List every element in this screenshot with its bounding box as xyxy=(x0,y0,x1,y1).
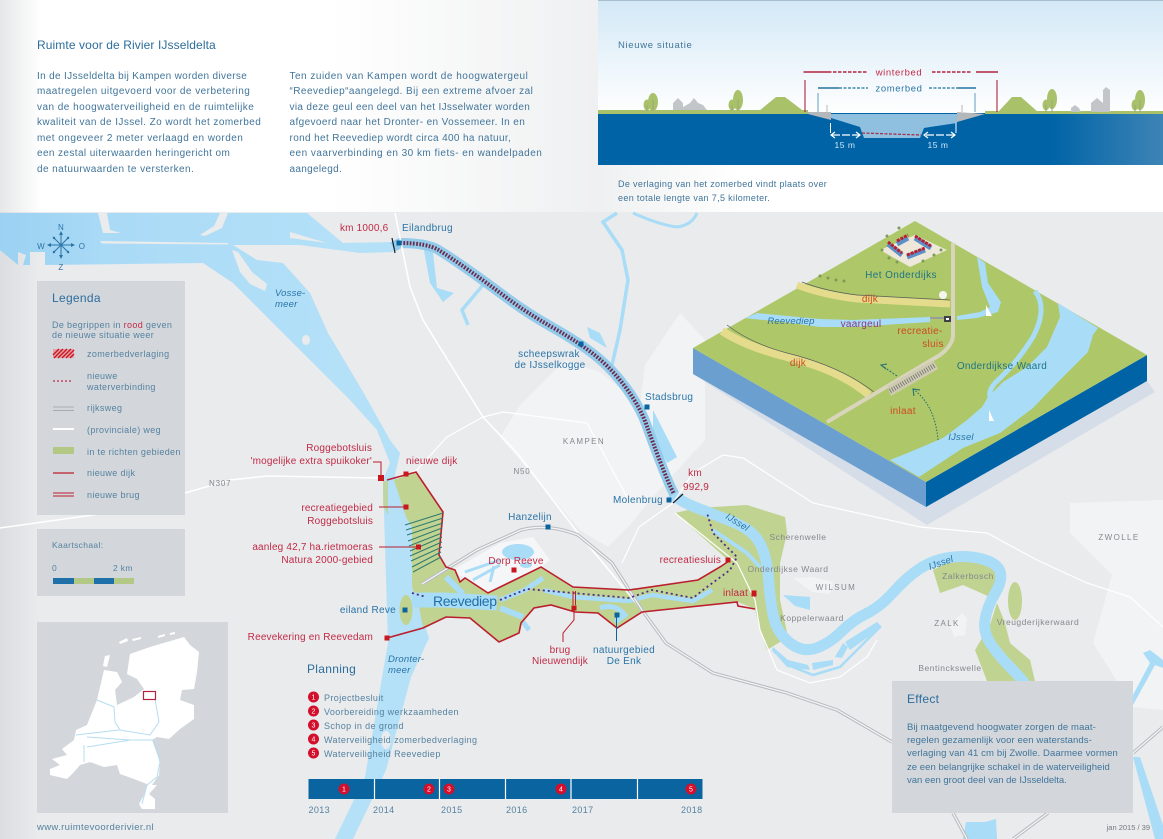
map labels: red: recreatiegebied xyxy=(301,503,373,514)
map labels: grey: Koppelerwaard xyxy=(780,613,844,623)
panel: isometric block diagram xyxy=(693,221,1155,525)
planning heading: Planning xyxy=(307,662,356,676)
winterbed marker xyxy=(804,68,998,112)
map labels: blue: Dronter- xyxy=(388,654,424,665)
urban areas xyxy=(500,313,1163,710)
planning list: 4 xyxy=(312,736,316,744)
map labels: grey: Onderdijkse Waard xyxy=(748,564,828,574)
map labels: blue: Eilandbrug xyxy=(402,223,453,234)
planning list: Voorbereiding werkzaamheden xyxy=(324,707,459,717)
map labels: blue: Molenbrug xyxy=(613,495,663,506)
15 m dimension arrows xyxy=(830,123,956,150)
rivers on locator map xyxy=(76,699,160,804)
river IJssel xyxy=(393,243,1030,690)
15 m dimension arrows: 15 m xyxy=(835,140,855,150)
panel: cross-section nieuwe situatie xyxy=(598,0,1163,165)
effect text: Bij maatgevend hoogwater zorgen de maat- xyxy=(907,722,1096,733)
text block: right column: afgevoerd naar het Dronter- en Vossemeer. In en xyxy=(290,117,525,128)
legend swatch: provinciale weg: (provinciale) weg xyxy=(87,425,161,435)
effect heading: Effect xyxy=(907,692,940,706)
map labels: grey: ZWOLLE xyxy=(1098,533,1140,542)
map labels: red: Roggebotsluis xyxy=(307,516,373,527)
rijksweg xyxy=(422,527,1163,839)
block water xyxy=(745,257,1098,477)
caption: cross-section xyxy=(618,179,827,203)
planning timeline: 2016 xyxy=(506,805,527,815)
block labels: inlaat xyxy=(890,406,916,417)
caption: cross-section: De verlaging van het zomerbed vindt plaats over xyxy=(618,179,827,189)
legend note: De begrippen in rood geven xyxy=(52,320,172,330)
heading: Nieuwe situatie xyxy=(618,40,692,51)
icon: compass: W xyxy=(37,242,45,251)
local roads xyxy=(408,412,1163,683)
panel: map scale: 2 km xyxy=(113,563,133,573)
planning timeline: 2017 xyxy=(572,805,593,815)
map labels: blue: Hanzelijn xyxy=(508,512,552,523)
legend swatch: in te richten gebieden: in te richten gebieden xyxy=(87,447,181,457)
brug Nieuwendijk marker: brug xyxy=(550,645,570,656)
effect text xyxy=(907,722,1118,786)
text block: right column: aangelegd. xyxy=(290,164,342,175)
planning timeline: 2015 xyxy=(441,805,462,815)
map labels: grey: Bentinckswelle xyxy=(918,663,982,673)
block faces xyxy=(693,221,1147,507)
text block: left column: van de hoogwaterveiligheid en de ruimtelijke xyxy=(37,102,254,113)
map labels: blue: natuurgebied xyxy=(593,645,655,656)
planning timeline: 4 xyxy=(559,786,563,794)
block shadow xyxy=(693,374,1155,525)
blue markers xyxy=(396,240,672,641)
inlet structure xyxy=(887,360,938,396)
legend swatch: nieuwe dijk: nieuwe dijk xyxy=(87,468,136,478)
map labels: blue: De Enk xyxy=(607,656,642,667)
new waterway dotted line xyxy=(412,513,737,600)
panel: planning xyxy=(307,662,702,815)
legend swatch: nieuwe dijk xyxy=(53,468,136,478)
bridge ticks xyxy=(392,238,683,503)
Dorp Reeve area xyxy=(453,537,550,593)
N50 road xyxy=(395,213,642,610)
effect text: van een groot deel van de IJsseldelta. xyxy=(907,775,1067,786)
map labels: blue: Reevediep xyxy=(433,593,497,609)
panel: legend xyxy=(37,281,185,515)
map labels: blue: IJssel xyxy=(927,554,956,573)
block labels: recreatie- xyxy=(897,326,943,337)
new dike lines xyxy=(387,472,755,642)
planning timeline: 2018 xyxy=(681,805,702,815)
text block: left column: met ongeveer 2 meter verlaagd en worden xyxy=(37,133,243,144)
map labels: grey: Scherenwelle xyxy=(769,532,827,542)
brug Nieuwendijk marker: Nieuwendijk xyxy=(532,656,589,667)
trees and buildings xyxy=(644,87,1145,112)
planning list xyxy=(308,692,477,759)
text block: left column: de natuurwaarden te versterken. xyxy=(37,164,194,175)
map labels: blue: scheepswrak xyxy=(518,349,581,360)
map labels: red: 992,9 xyxy=(683,482,709,493)
planning timeline: 1 xyxy=(342,786,346,794)
map labels: red xyxy=(248,223,748,643)
recreation lock xyxy=(930,316,951,322)
map labels: red: aanleg 42,7 ha.rietmoeras xyxy=(252,542,373,553)
water: side canals xyxy=(423,213,1163,839)
planning list: Projectbesluit xyxy=(324,693,384,703)
Wadden islands xyxy=(103,632,175,667)
caption: cross-section: een totale lengte van 7,5 kilometer. xyxy=(618,193,770,203)
website: www.ruimtevoorderivier.nl xyxy=(36,822,154,833)
map labels: red: 'mogelijke extra spuikoker' xyxy=(250,456,372,467)
block labels: dijk xyxy=(790,358,807,369)
map labels: grey: Vreugderijkerwaard xyxy=(997,617,1079,627)
icon: compass: N xyxy=(58,223,64,232)
planning timeline: 2013 xyxy=(308,805,330,815)
flow arrows xyxy=(881,364,938,440)
map labels: grey xyxy=(209,437,1140,673)
map labels: grey: N307 xyxy=(209,479,231,488)
block labels: Onderdijkse Waard xyxy=(957,361,1047,372)
river channel xyxy=(808,112,985,138)
map labels: blue xyxy=(275,223,956,676)
map labels: grey: N50 xyxy=(513,467,531,476)
map labels: red: Reevekering en Reevedam xyxy=(248,632,373,643)
map xyxy=(0,212,1163,839)
text block: right column: Ten zuiden van Kampen wordt de hoogwatergeul xyxy=(290,71,528,82)
introduction text xyxy=(37,38,542,175)
planning list: 2 xyxy=(312,708,316,716)
15 m dimension arrows: 15 m xyxy=(928,140,948,150)
block labels: sluis xyxy=(922,339,944,350)
red markers xyxy=(378,472,756,640)
planning list: Waterveiligheid zomerbedverlaging xyxy=(324,735,477,745)
Reevediep water channel xyxy=(412,530,760,630)
effect text: regelen gezamenlijk voor een waterstands- xyxy=(907,735,1092,746)
planning list: Waterveiligheid Reevediep xyxy=(324,749,441,759)
map labels: blue: meer xyxy=(388,665,411,676)
map labels: grey: KAMPEN xyxy=(563,437,605,446)
panel: map scale xyxy=(37,529,185,596)
panel: Netherlands locator map xyxy=(37,622,228,813)
effect text: ze een belangrijke schakel in de waterveiligheid xyxy=(907,762,1110,773)
panel: map scale: Kaartschaal: xyxy=(52,540,103,550)
text block: left column: een zestal uiterwaarden heringericht om xyxy=(37,148,230,159)
block labels: vaargeul xyxy=(841,319,881,330)
planning timeline: 5 xyxy=(689,786,693,794)
legend heading: Legenda xyxy=(52,291,101,305)
text block: left column xyxy=(37,71,261,175)
winterbed marker: winterbed xyxy=(875,68,922,78)
page background xyxy=(0,0,1163,212)
zomerbed marker xyxy=(818,84,976,112)
map labels: red: Roggebotsluis xyxy=(306,443,372,454)
map labels: red: inlaat xyxy=(723,588,748,599)
panel: map scale: 0 xyxy=(52,563,57,573)
water: sea, Vossemeer and Drontermeer xyxy=(0,213,429,839)
map labels: grey: Zalkerbosch xyxy=(942,571,994,581)
zomerbedverlaging hatching xyxy=(400,243,674,494)
legend note: de nieuwe situatie weer xyxy=(52,330,154,340)
locator rectangle xyxy=(144,692,156,700)
planning list: 5 xyxy=(312,750,316,758)
village Het Onderdijks xyxy=(818,226,947,299)
text block: left column: kwaliteit van de IJssel. Zo wordt het zomerbed xyxy=(37,117,261,128)
map labels: blue: Stadsbrug xyxy=(645,392,693,403)
land details in water xyxy=(98,213,391,749)
block road xyxy=(827,243,953,422)
text block: left column: maatregelen uitgevoerd voor de verbetering xyxy=(37,86,250,97)
text block: right column xyxy=(290,71,542,175)
legend swatch: provinciale weg xyxy=(53,425,161,435)
panel: effect xyxy=(892,681,1133,813)
planning timeline xyxy=(308,779,702,815)
Netherlands outline xyxy=(50,637,199,809)
legend swatch: nieuwe waterverbinding: nieuwe xyxy=(87,371,118,381)
N307 road xyxy=(0,476,380,528)
map labels: red: km xyxy=(688,468,702,479)
page number: jan 2015 / 39 xyxy=(1106,823,1150,832)
block dikes xyxy=(722,282,950,395)
planning list: 1 xyxy=(312,694,316,702)
green zones xyxy=(383,472,1035,681)
legend swatch: nieuwe waterverbinding: waterverbinding xyxy=(86,382,156,392)
icon: compass: Z xyxy=(58,263,64,272)
legend swatch: nieuwe brug xyxy=(53,490,140,500)
block labels: IJssel xyxy=(948,432,974,443)
legend note xyxy=(52,320,172,340)
brug Nieuwendijk marker xyxy=(532,591,589,667)
block labels: dijk xyxy=(862,294,879,305)
block labels: Reevediep xyxy=(767,316,815,327)
map labels: blue: IJssel xyxy=(723,511,751,534)
roads xyxy=(0,213,1163,839)
sailboats xyxy=(986,305,994,421)
planning timeline: 3 xyxy=(447,786,451,794)
planning timeline: 2 xyxy=(427,786,431,794)
text block: right column: een vaarverbinding en 30 km fiets- en wandelpaden xyxy=(290,148,542,159)
icon: compass xyxy=(37,223,85,272)
map labels: red: Dorp Reeve xyxy=(488,556,544,567)
legend swatch: zomerbedverlaging: zomerbedverlaging xyxy=(87,349,170,359)
legend swatch: rijksweg xyxy=(53,403,122,413)
legend swatch: rijksweg: rijksweg xyxy=(87,403,122,413)
map labels: red: Natura 2000-gebied xyxy=(281,555,373,566)
text block: right column: via deze geul een deel van het IJsselwater worden xyxy=(290,102,530,113)
block labels: Het Onderdijks xyxy=(865,270,937,281)
leader lines xyxy=(373,462,418,547)
map labels: blue: de IJsselkogge xyxy=(515,360,586,371)
nature reed marsh hatching xyxy=(405,513,443,572)
planning timeline: 2014 xyxy=(373,805,394,815)
legend swatch: nieuwe brug: nieuwe brug xyxy=(87,490,140,500)
map labels: red: nieuwe dijk xyxy=(406,456,458,467)
map labels: blue: meer xyxy=(275,299,298,310)
legend swatch: nieuwe waterverbinding xyxy=(53,371,156,392)
map labels: grey: ZALK xyxy=(934,619,960,628)
map labels: red: km 1000,6 xyxy=(340,223,389,234)
ground and dikes xyxy=(598,97,1163,114)
text block: left column: In de IJsseldelta bij Kampen worden diverse xyxy=(37,71,247,82)
map labels: blue: eiland Reve xyxy=(340,605,396,616)
map labels: red: recreatiesluis xyxy=(660,555,721,566)
title: Ruimte voor de Rivier IJsseldelta xyxy=(37,38,216,52)
planning list: 3 xyxy=(312,722,316,730)
text block: right column: “Reevediep“aangelegd. Bij een extreme afvoer zal xyxy=(290,86,533,97)
icon: compass: O xyxy=(79,242,85,251)
planning list: Schop in de grond xyxy=(324,721,404,731)
block labels xyxy=(767,270,1047,443)
effect text: verlaging van 41 cm bij Zwolle. Daarmee vormen xyxy=(907,748,1118,759)
map labels: grey: WILSUM xyxy=(816,583,856,592)
zomerbed marker: zomerbed xyxy=(875,84,923,94)
text block: right column: rond het Reevediep wordt circa 400 ha natuur, xyxy=(290,133,511,144)
map labels: blue: Vosse- xyxy=(275,288,305,299)
